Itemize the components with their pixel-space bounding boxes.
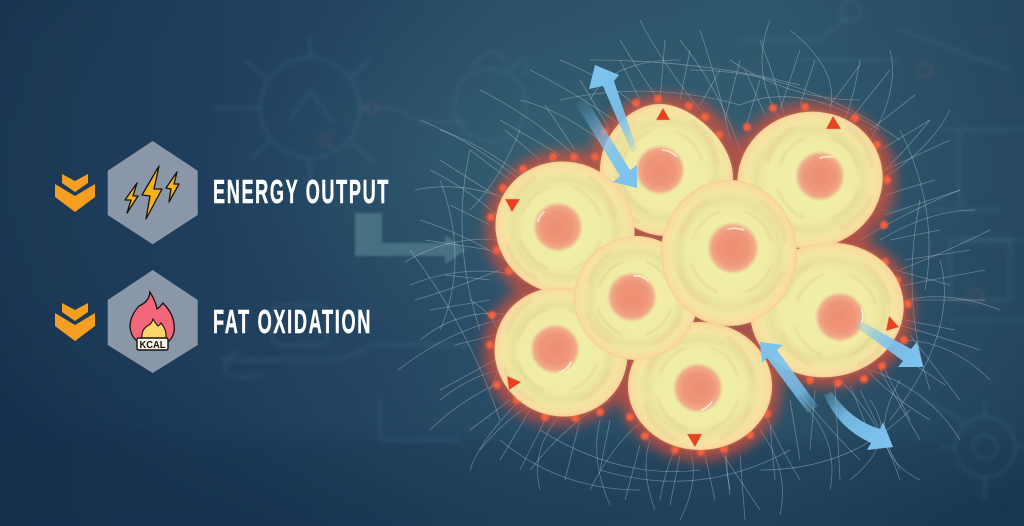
cell: top [600,104,733,236]
row: fat oxidation [55,270,372,373]
row: energy output [55,141,390,244]
cell: centre [661,180,797,326]
icon: lightning bolts on hexagon [108,141,198,244]
blue arrow: toward right cell [760,342,818,413]
cell: left [477,142,653,314]
blue arrow: into top cell [575,97,637,188]
cell cluster [473,95,914,450]
nucleus highlights [538,150,863,410]
ghost circuit background [215,2,1024,500]
cell: top right [722,95,898,265]
cell: bottom [628,322,772,450]
cell: middle left [574,236,698,360]
warning triangles [505,108,899,447]
icon: kcal flame on hexagon [108,270,198,373]
red surface dots [486,96,912,456]
hair fibers [398,20,1000,520]
blue arrow: out of right cell [855,320,923,367]
chevrons [55,174,95,212]
blue arrow: curved lower right [824,392,893,450]
icon: kcal flame on hexagon: KCAL [140,339,166,351]
red glow halo [483,94,914,461]
heading: ENERGY OUTPUT [213,173,390,210]
blue arrow: up-left from top cell [589,65,637,153]
ghost arrow pointing to cells [355,213,466,264]
chevrons [55,303,95,341]
cell: right [740,231,914,389]
heading: FAT OXIDATION [213,303,372,340]
cell: bottom left [473,266,649,438]
